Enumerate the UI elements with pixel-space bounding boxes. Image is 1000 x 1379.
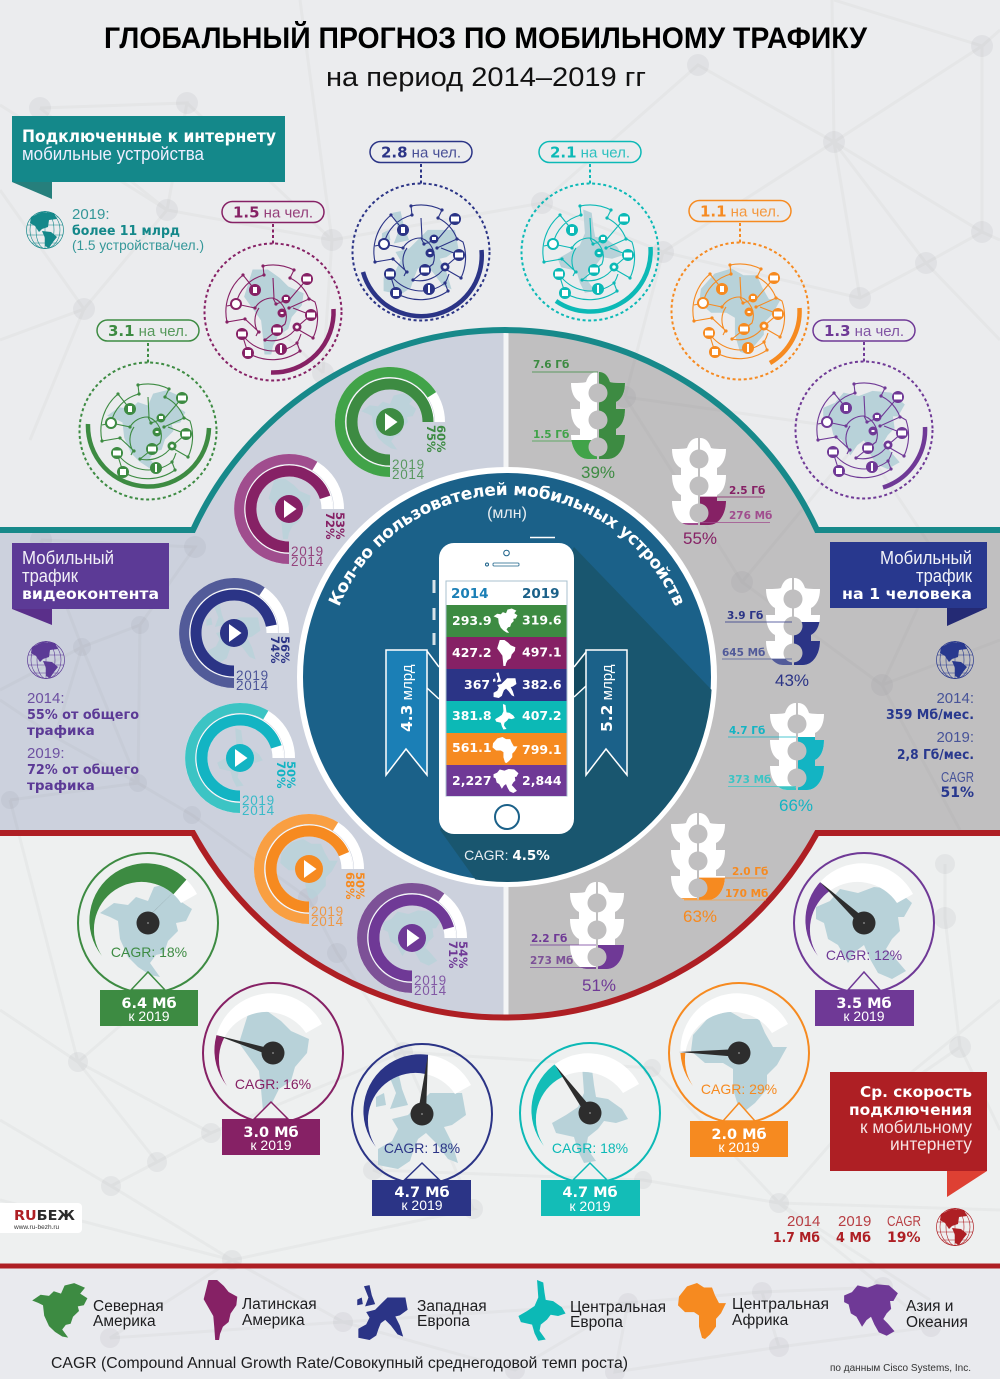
- donut: Central Africa video: 68%: [343, 872, 357, 900]
- row: Latin America: 497.1: [522, 644, 562, 660]
- traffic light: Central Europe 66%: 373 Мб: [728, 774, 771, 786]
- gauge: Asia and Oceania speed: [794, 853, 934, 1026]
- device circle: North America 3.1: [80, 320, 216, 500]
- gauge: Central Europe speed: 4.7 Мб: [562, 1185, 618, 1201]
- donut: Central Europe video: [190, 708, 298, 818]
- legend: Central Europe: Европа: [570, 1314, 623, 1331]
- device circle: Western Europe 2.8: [352, 142, 490, 320]
- traffic light: Asia and Oceania 51%: 273 Мб: [530, 955, 573, 967]
- gauge: Latin America speed: CAGR: 16%: [235, 1076, 311, 1092]
- traffic light: Asia and Oceania 51%: 51%: [582, 976, 616, 995]
- panel: average connection speed: [830, 1072, 987, 1197]
- title: [104, 21, 868, 92]
- panel: traffic per person heading: трафик: [916, 565, 973, 586]
- teal top border arc: [0, 330, 1000, 530]
- footer red line: [0, 1264, 1000, 1268]
- icon: blue globe: [936, 642, 974, 678]
- row: Asia and Oceania: 2,844: [522, 773, 562, 788]
- device circle: Latin America 1.5: 1.5 на чел.: [233, 204, 313, 222]
- table header: 2019: [522, 586, 560, 602]
- traffic light: Central Europe 66%: 66%: [779, 796, 813, 815]
- legend: Latin America: Латинская: [242, 1296, 317, 1313]
- donut: Central Africa video: 50%: [353, 872, 367, 900]
- title: ГЛОБАЛЬНЫЙ ПРОГНОЗ ПО МОБИЛЬНОМУ ТРАФИКУ: [104, 21, 868, 55]
- device circle: Central Europe 2.1: [522, 142, 658, 320]
- row: North America: [446, 605, 566, 637]
- donut: Western Europe video: 74%: [268, 636, 282, 664]
- legend: Central Africa: [678, 1283, 829, 1339]
- donut: Central Africa video: [259, 819, 367, 929]
- gauge: Central Europe speed: CAGR: 18%: [552, 1140, 628, 1156]
- gauge: North America speed: CAGR: 18%: [111, 944, 187, 960]
- gauge: Latin America speed: 3.0 Мб: [243, 1125, 299, 1141]
- row: Asia and Oceania: [446, 765, 566, 796]
- donut: Latin America video: 2019: [291, 544, 324, 559]
- heading on arc: Кол-во пользователей мобильных устройств: [328, 482, 682, 606]
- legend: Central Europe: [518, 1280, 666, 1341]
- donut: Central Europe video: 2019: [242, 793, 275, 808]
- legend: Central Europe: Центральная: [570, 1299, 666, 1316]
- gauge: Central Africa speed: [669, 983, 809, 1157]
- panel: central mobile users circle: CAGR: 4.5%: [464, 847, 550, 864]
- device circle: Asia and Oceania 1.3: [796, 320, 932, 498]
- icon: teal globe: [26, 212, 64, 248]
- traffic light: Western Europe 43%: [722, 578, 820, 690]
- traffic light: North America 39%: 7.6 Гб: [533, 359, 569, 371]
- legend: North America: Северная: [93, 1298, 164, 1315]
- legend: Western Europe: Западная: [417, 1298, 487, 1315]
- text: traffic per person stats: [886, 690, 974, 801]
- panel: central mobile users circle: (млн): [487, 505, 527, 522]
- legend: Western Europe: Европа: [417, 1313, 470, 1330]
- donut: Asia and Oceania video: 2014: [414, 983, 447, 998]
- donut: North America video: 2014: [392, 467, 425, 482]
- legend: North America: Америка: [93, 1313, 156, 1330]
- ribbon: 5.2 billion: [586, 650, 627, 775]
- donut: Asia and Oceania video: 2019: [414, 973, 447, 988]
- donut: Central Europe video: 70%: [274, 761, 288, 789]
- legend: Asia and Oceania: [844, 1284, 968, 1336]
- donut: North America video: 2019: [392, 457, 425, 472]
- traffic light: Latin America 55%: 2.5 Гб: [729, 485, 765, 497]
- band: centre divider: [504, 330, 508, 1017]
- text: speed stats: 4 Мб: [836, 1231, 871, 1246]
- traffic light: Latin America 55%: 55%: [683, 529, 717, 548]
- panel: connected devices heading: мобильные устройства: [22, 144, 205, 164]
- footnote: CAGR definition: CAGR (Compound Annual Growth Rate/Совокупный среднегодовой темп роста): [51, 1355, 628, 1372]
- gauge: North America speed: 6.4 Мб: [121, 996, 177, 1012]
- gauge: Asia and Oceania speed: к 2019: [843, 1008, 885, 1024]
- donut: Latin America video: [239, 459, 347, 569]
- gauge: Latin America speed: к 2019: [250, 1137, 292, 1153]
- gauge: Latin America speed: [203, 983, 343, 1155]
- traffic light: Asia and Oceania 51%: 2.2 Гб: [531, 933, 567, 945]
- text: video share: 2019:: [27, 745, 65, 762]
- phone with users table: [439, 543, 574, 834]
- donut: Western Europe video: [184, 583, 292, 693]
- ribbon: 5.2 billion: 5.2 млрд: [598, 664, 616, 732]
- panel: video traffic heading: видеоконтента: [22, 585, 159, 603]
- text: 2019 devices: более 11 млрд: [72, 223, 180, 239]
- donut: Latin America video: 2014: [291, 554, 324, 569]
- text: 2019 devices: [72, 206, 204, 253]
- row: Central Europe: 381.8: [452, 708, 492, 723]
- donut: North America video: 60%: [434, 425, 448, 453]
- footnote: source: по данным Cisco Systems, Inc.: [830, 1362, 971, 1374]
- panel: average connection speed: интернету: [890, 1134, 972, 1154]
- traffic light: North America 39%: 39%: [581, 463, 615, 482]
- text: speed stats: 19%: [887, 1230, 921, 1246]
- gauge: North America speed: к 2019: [128, 1008, 170, 1024]
- gauge: Asia and Oceania speed: CAGR: 12%: [826, 947, 902, 963]
- traffic light: Asia and Oceania 51%: [530, 882, 624, 995]
- traffic light: Central Africa 63%: 170 Мб: [725, 888, 768, 900]
- device circle: Central Europe 2.1: 2.1 на чел.: [550, 144, 630, 162]
- row: Western Europe: [446, 669, 566, 701]
- donut: Asia and Oceania video: [362, 888, 470, 998]
- panel: average connection speed: Ср. скорость: [860, 1083, 972, 1101]
- legend: Central Africa: Центральная: [732, 1296, 829, 1313]
- traffic light: Latin America 55%: 276 Мб: [729, 510, 772, 522]
- panel: video traffic heading: [12, 543, 169, 625]
- ribbon: 4.3 billion: 4.3 млрд: [398, 664, 416, 732]
- legend: Asia and Oceania: Азия и: [906, 1298, 953, 1315]
- traffic light: North America 39%: [532, 359, 625, 482]
- ribbon: 4.3 billion: [386, 650, 427, 775]
- traffic light: Central Africa 63%: 63%: [683, 907, 717, 926]
- background: footer: [0, 1268, 1000, 1379]
- panel: video traffic heading: Мобильный: [22, 547, 114, 568]
- device circle: Central Africa 1.1: [672, 200, 808, 380]
- donut: Western Europe video: 56%: [278, 636, 292, 664]
- text: 2019 devices: (1.5 устройства/чел.): [72, 237, 204, 253]
- logo: RUБЕЖ: [14, 1208, 75, 1224]
- traffic light: Western Europe 43%: 43%: [775, 671, 809, 690]
- legend: Western Europe: [357, 1285, 487, 1340]
- legend: Asia and Oceania: Океания: [906, 1314, 968, 1331]
- gauge: North America speed: [78, 853, 218, 1026]
- traffic light: Western Europe 43%: 645 Мб: [722, 647, 765, 659]
- traffic light: Central Europe 66%: [728, 703, 824, 815]
- panel: average connection speed: к мобильному: [860, 1117, 972, 1137]
- text: video share: 2014:: [27, 690, 65, 707]
- row: Central Africa: [446, 733, 566, 765]
- legend: Central Africa: Африка: [732, 1312, 789, 1329]
- donut: Latin America video: 72%: [323, 512, 337, 540]
- panel: traffic per person heading: [830, 542, 987, 626]
- panel: average connection speed: подключения: [849, 1101, 972, 1119]
- text: speed stats: 1.7 Мб: [773, 1231, 820, 1246]
- band: left video panel: [0, 330, 504, 1017]
- device circle: Central Africa 1.1: 1.1 на чел.: [700, 202, 780, 220]
- legend: Latin America: [204, 1280, 317, 1340]
- table header: [451, 586, 560, 602]
- donut: Central Africa video: 2019: [311, 904, 344, 919]
- row: Latin America: [446, 637, 566, 669]
- row: Central Africa: 799.1: [522, 742, 562, 757]
- panel: traffic per person heading: на 1 человека: [842, 585, 972, 603]
- row: North America: 293.9: [452, 613, 492, 628]
- text: traffic per person stats: 2014:: [936, 690, 974, 707]
- gauge: Western Europe speed: к 2019: [401, 1197, 443, 1213]
- panel: traffic per person heading: Мобильный: [880, 547, 972, 568]
- traffic light: North America 39%: 1.5 Гб: [533, 429, 569, 441]
- row: North America: 319.6: [522, 612, 562, 628]
- gauge: Central Europe speed: [520, 1043, 660, 1216]
- traffic light: Central Europe 66%: 4.7 Гб: [729, 725, 765, 737]
- text: speed stats: CAGR: [887, 1213, 921, 1230]
- donut: North America video: 75%: [424, 425, 438, 453]
- gauge: Western Europe speed: [352, 1044, 492, 1216]
- device circle: Asia and Oceania 1.3: 1.3 на чел.: [824, 322, 904, 340]
- text: speed stats: 2014: [787, 1213, 820, 1230]
- gauge: Central Africa speed: 2.0 Мб: [711, 1127, 767, 1143]
- text: video share: трафика: [27, 723, 95, 739]
- traffic light: Latin America 55%: [672, 438, 772, 548]
- donut: Central Africa video: 2014: [311, 914, 344, 929]
- text: video share: [27, 690, 139, 794]
- row: Latin America: 427.2: [452, 645, 492, 660]
- legend: North America: [32, 1283, 164, 1338]
- donut: North America video: [340, 372, 448, 482]
- text: traffic per person stats: 2,8 Гб/мес.: [897, 748, 974, 763]
- band: right traffic panel: [508, 330, 1000, 1017]
- donut: Western Europe video: 2014: [236, 678, 269, 693]
- text: traffic per person stats: 51%: [940, 785, 974, 801]
- background: lower page: [0, 830, 1000, 1270]
- gauge: Central Africa speed: CAGR: 29%: [701, 1081, 777, 1097]
- text: video share: 55% от общего: [27, 707, 139, 723]
- gauge: Central Europe speed: к 2019: [569, 1198, 611, 1214]
- text: video share: трафика: [27, 778, 95, 794]
- gauge: Western Europe speed: CAGR: 18%: [384, 1140, 460, 1156]
- red bottom border arc: [0, 833, 1000, 1018]
- text: traffic per person stats: 359 Мб/мес.: [886, 708, 974, 723]
- traffic light: Western Europe 43%: 3.9 Гб: [727, 610, 763, 622]
- donut: Central Europe video: 50%: [284, 761, 298, 789]
- device circle: Latin America 1.5: [204, 202, 342, 380]
- icon: purple globe: [28, 642, 64, 678]
- donut: Western Europe video: 2019: [236, 668, 269, 683]
- table header: 2014: [451, 586, 489, 602]
- donut: Latin America video: 53%: [333, 512, 347, 540]
- title: на период 2014–2019 гг: [326, 62, 646, 92]
- traffic light: Central Africa 63%: [671, 813, 768, 926]
- gauge: Central Africa speed: к 2019: [718, 1139, 760, 1155]
- legend: Latin America: Америка: [242, 1312, 305, 1329]
- text: speed stats: [773, 1213, 921, 1246]
- text: speed stats: 2019: [838, 1213, 871, 1230]
- gauge: Asia and Oceania speed: 3.5 Мб: [836, 996, 892, 1012]
- text: traffic per person stats: CAGR: [941, 769, 974, 786]
- panel: central mobile users circle: [297, 467, 717, 887]
- donut: Asia and Oceania video: 54%: [456, 941, 470, 969]
- device circle: North America 3.1: 3.1 на чел.: [108, 322, 188, 340]
- donut: Asia and Oceania video: 71%: [446, 941, 460, 969]
- row: Asia and Oceania: 2,227: [452, 773, 492, 788]
- logo: [0, 1203, 82, 1233]
- text: video share: 72% от общего: [27, 762, 139, 778]
- panel: connected devices heading: Подключенные к интернету: [22, 127, 276, 146]
- panel: connected devices heading: [12, 116, 285, 199]
- row: Central Europe: [446, 701, 566, 733]
- traffic light: Central Africa 63%: 2.0 Гб: [732, 866, 768, 878]
- panel: video traffic heading: трафик: [22, 565, 79, 586]
- device circle: Western Europe 2.8: 2.8 на чел.: [381, 144, 461, 162]
- logo: www.ru-bezh.ru: [13, 1224, 60, 1231]
- row: Western Europe: 367: [464, 677, 490, 692]
- row: Central Europe: 407.2: [522, 708, 562, 723]
- icon: red globe: [936, 1208, 974, 1246]
- donut: Central Europe video: 2014: [242, 803, 275, 818]
- text: 2019 devices: 2019:: [72, 206, 110, 223]
- row: Central Africa: 561.1: [452, 740, 492, 755]
- row: Western Europe: 382.6: [522, 677, 562, 692]
- text: traffic per person stats: 2019:: [936, 729, 974, 746]
- gauge: Western Europe speed: 4.7 Мб: [394, 1185, 450, 1201]
